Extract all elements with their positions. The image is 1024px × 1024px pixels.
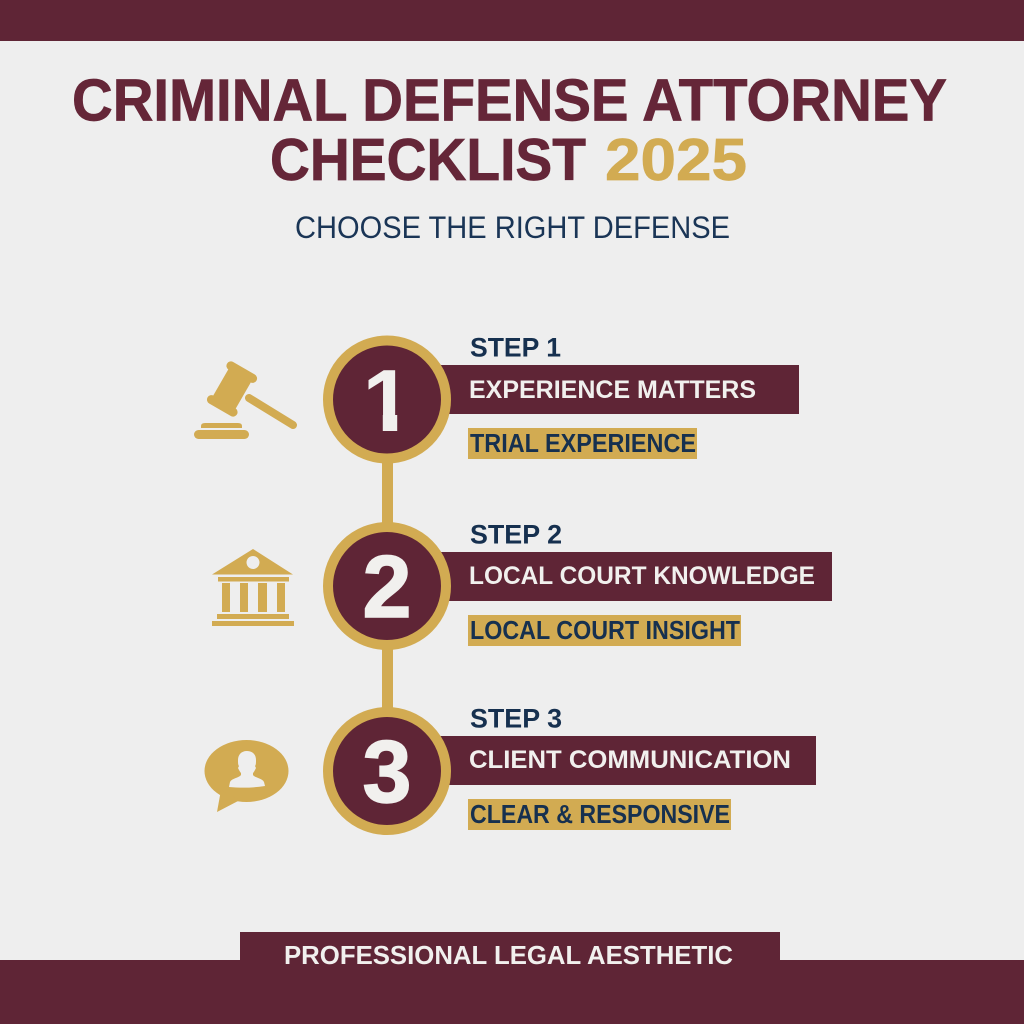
number badge <box>328 527 446 645</box>
highlight tag: LOCAL COURT INSIGHT <box>470 617 740 645</box>
step 1 <box>194 332 799 459</box>
step heading: EXPERIENCE MATTERS <box>469 376 756 404</box>
title bar <box>440 365 799 414</box>
step label: STEP 2 <box>470 520 562 550</box>
step heading: CLIENT COMMUNICATION <box>469 746 791 774</box>
step 2 <box>212 520 832 646</box>
footer banner <box>0 932 1024 1024</box>
step heading: LOCAL COURT KNOWLEDGE <box>469 562 815 590</box>
highlight tag: CLEAR & RESPONSIVE <box>470 801 730 829</box>
subtitle: CHOOSE THE RIGHT DEFENSE <box>295 209 730 245</box>
number: 3 <box>363 722 411 821</box>
step 3 <box>204 704 816 830</box>
number badge <box>328 340 446 458</box>
step label: STEP 1 <box>470 332 561 362</box>
footer text: PROFESSIONAL LEGAL AESTHETIC <box>284 940 733 970</box>
title bar <box>440 552 832 601</box>
number: 1 <box>363 351 411 450</box>
timeline connectors <box>382 455 393 715</box>
title <box>72 68 947 193</box>
icon: gavel <box>194 360 293 439</box>
step label: STEP 3 <box>470 704 562 734</box>
number: 2 <box>363 537 411 636</box>
icon: courthouse <box>212 549 294 626</box>
top banner <box>0 0 1024 41</box>
title bar <box>440 736 816 785</box>
number badge <box>328 712 446 830</box>
highlight tag: TRIAL EXPERIENCE <box>470 430 696 458</box>
title: CRIMINAL DEFENSE ATTORNEY <box>72 68 947 134</box>
icon: speech bubble with person <box>204 740 288 812</box>
title: CHECKLIST <box>270 127 586 193</box>
title: 2025 <box>605 127 747 193</box>
